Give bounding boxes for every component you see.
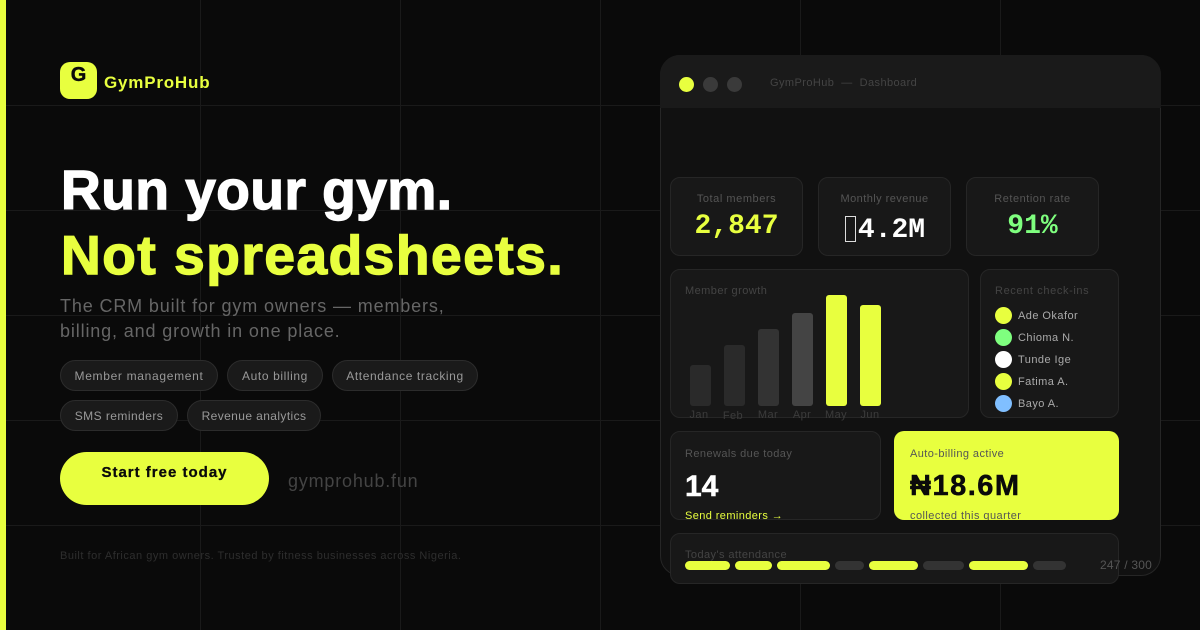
axis label: Feb bbox=[723, 410, 743, 422]
member name: Bayo A. bbox=[1018, 398, 1059, 410]
window title: GymProHub — Dashboard bbox=[770, 77, 917, 89]
pill bbox=[227, 360, 323, 391]
card label: Today's attendance bbox=[685, 549, 787, 561]
segment bbox=[777, 561, 830, 570]
bar: Mar bbox=[758, 329, 779, 406]
panel: total members bbox=[670, 177, 803, 256]
bar: Jan bbox=[690, 365, 711, 406]
icon: avatar bbox=[995, 373, 1012, 390]
icon: window dot bbox=[703, 77, 718, 92]
panel: renewals due bbox=[670, 431, 881, 520]
panel: attendance bbox=[670, 533, 1119, 584]
stat value: 2,847 bbox=[694, 211, 778, 242]
member name: Ade Okafor bbox=[1018, 310, 1078, 322]
icon: avatar bbox=[995, 329, 1012, 346]
axis label: Mar bbox=[758, 409, 778, 421]
segment bbox=[835, 561, 864, 570]
axis label: May bbox=[825, 409, 847, 421]
brand name: GymProHub bbox=[104, 73, 210, 92]
headline bbox=[61, 159, 564, 286]
feature pills bbox=[60, 360, 478, 431]
panel title: Recent check-ins bbox=[995, 285, 1089, 297]
chart title: Member growth bbox=[685, 285, 767, 297]
pill bbox=[60, 360, 218, 391]
website url: gymprohub.fun bbox=[288, 471, 418, 491]
bar: Apr bbox=[792, 313, 813, 406]
axis label: Apr bbox=[793, 409, 811, 421]
renewals count: 14 bbox=[685, 470, 718, 503]
pill bbox=[187, 400, 321, 431]
axis label: Jun bbox=[861, 409, 879, 421]
pill: Revenue analytics bbox=[202, 409, 306, 423]
cta button: Start free today bbox=[101, 464, 228, 481]
panel: auto-billing bbox=[894, 431, 1119, 520]
subheading bbox=[60, 296, 445, 341]
card label: Auto-billing active bbox=[910, 448, 1004, 460]
icon: window dot bbox=[727, 77, 742, 92]
window title bar bbox=[660, 55, 1161, 108]
logo bbox=[60, 62, 210, 99]
icon: logo mark bbox=[60, 62, 97, 99]
stat value: 91% bbox=[1007, 211, 1058, 242]
pill bbox=[332, 360, 478, 391]
headline line two: Not spreadsheets. bbox=[61, 224, 564, 286]
stat label: Retention rate bbox=[994, 193, 1071, 205]
bar: Jun bbox=[860, 305, 881, 406]
check-in list bbox=[995, 307, 1078, 412]
bar: May bbox=[826, 295, 847, 406]
billing amount: ₦18.6M bbox=[910, 470, 1021, 502]
panel: member growth chart bbox=[670, 269, 969, 418]
segment bbox=[735, 561, 772, 570]
panel: monthly revenue bbox=[818, 177, 951, 256]
pill: Attendance tracking bbox=[346, 369, 464, 383]
pill bbox=[60, 400, 178, 431]
subheading: The CRM built for gym owners — members, bbox=[60, 296, 445, 316]
bar: Feb bbox=[724, 345, 745, 406]
member name: Fatima A. bbox=[1018, 376, 1069, 388]
pill: Member management bbox=[75, 369, 203, 383]
segment bbox=[1033, 561, 1066, 570]
pill: SMS reminders bbox=[75, 409, 163, 423]
footer note: Built for African gym owners. Trusted by fitness businesses across Nigeria. bbox=[60, 550, 461, 562]
cta button bbox=[60, 452, 269, 505]
bar chart bbox=[690, 295, 881, 422]
panel: dashboard window bbox=[660, 55, 1161, 576]
icon: avatar bbox=[995, 307, 1012, 324]
member name: Tunde Ige bbox=[1018, 354, 1071, 366]
stat label: Monthly revenue bbox=[840, 193, 929, 205]
segment bbox=[869, 561, 918, 570]
pill: Auto billing bbox=[242, 369, 308, 383]
icon: window dot bbox=[679, 77, 694, 92]
attendance count: 247 / 300 bbox=[1100, 558, 1152, 572]
subheading: billing, and growth in one place. bbox=[60, 321, 341, 341]
member name: Chioma N. bbox=[1018, 332, 1074, 344]
stat label: Total members bbox=[697, 193, 776, 205]
attendance bars bbox=[685, 561, 1066, 570]
panel: retention rate bbox=[966, 177, 1099, 256]
axis label: Jan bbox=[690, 409, 708, 421]
accent bar bbox=[0, 0, 6, 630]
stat value: 4.2M bbox=[858, 215, 925, 246]
icon: logo mark: G bbox=[71, 64, 86, 86]
panel: recent check-ins bbox=[980, 269, 1119, 418]
card label: Renewals due today bbox=[685, 448, 792, 460]
icon: avatar bbox=[995, 351, 1012, 368]
headline line one: Run your gym. bbox=[61, 159, 453, 221]
icon: avatar bbox=[995, 395, 1012, 412]
segment bbox=[923, 561, 964, 570]
segment bbox=[685, 561, 730, 570]
reminder link: Send reminders → bbox=[685, 510, 783, 522]
segment bbox=[969, 561, 1028, 570]
